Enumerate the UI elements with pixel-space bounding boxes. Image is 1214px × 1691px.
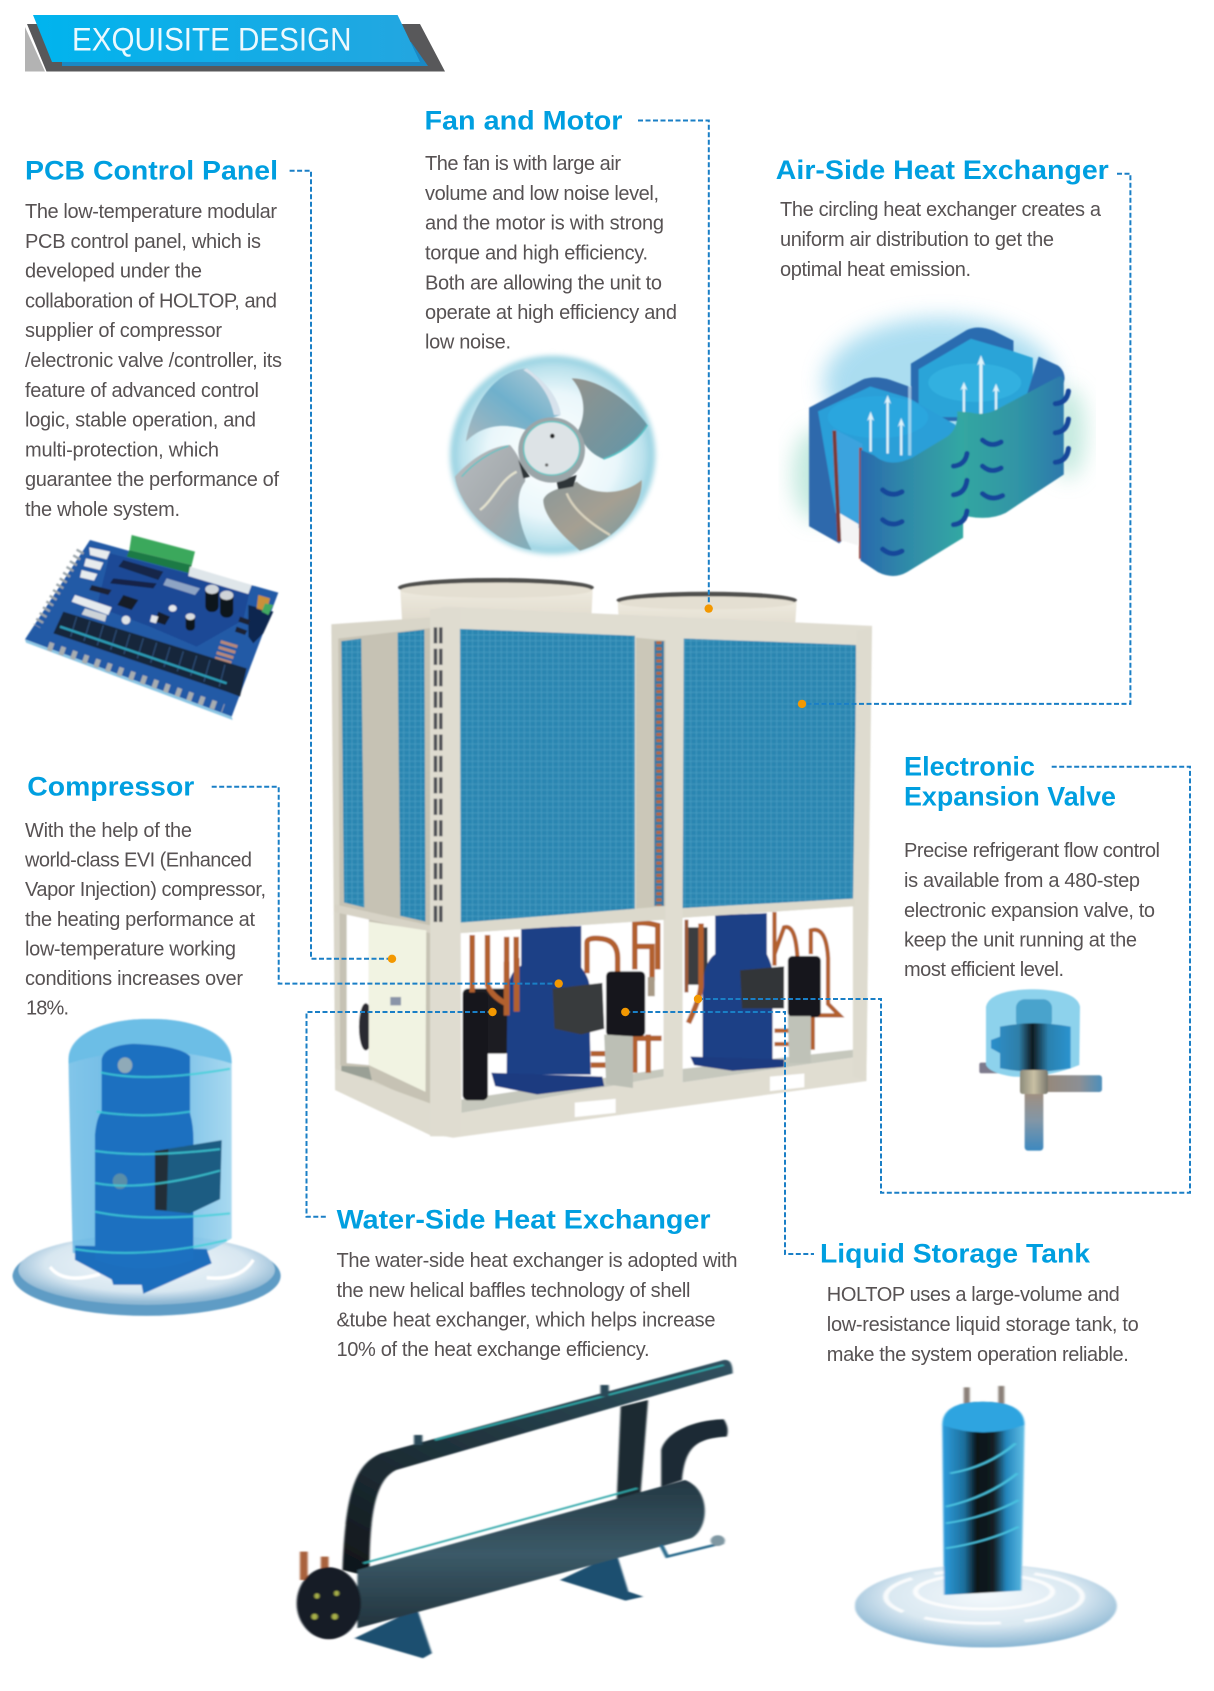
leader: Fan and Motor xyxy=(638,120,709,608)
lifting slots xyxy=(575,1099,616,1117)
text: PCB Control Panel description: the whole system. xyxy=(25,499,180,521)
inward-flow arrows xyxy=(883,391,1068,554)
mounting plate xyxy=(75,1246,212,1294)
text: Electronic Expansion Valve description xyxy=(904,840,1160,981)
text: Compressor description: world-class EVI (Enhanced xyxy=(24,849,252,871)
leader: Water-Side Heat Exchanger xyxy=(306,1012,492,1217)
lower opening left xyxy=(461,920,664,1113)
leader: Air-Side Heat Exchanger xyxy=(802,174,1130,704)
left fan cylinder xyxy=(400,589,593,629)
text: Liquid Storage Tank description: make the system operation reliable. xyxy=(827,1344,1129,1366)
junction box xyxy=(155,1140,222,1213)
center and right pillars xyxy=(666,626,683,1107)
text: Electronic Expansion Valve description: keep the unit running at the xyxy=(904,930,1137,952)
text: Water-Side Heat Exchanger description: The water-side heat exchanger is adopted with xyxy=(336,1250,738,1272)
rear right corner wall xyxy=(1027,357,1065,398)
glass cover xyxy=(986,989,1080,1077)
text: PCB Control Panel description: The low-temperature modular xyxy=(25,201,277,223)
relay row xyxy=(53,612,247,697)
text: Water-Side Heat Exchanger description: 10% of the heat exchange efficiency. xyxy=(336,1339,650,1361)
end cap xyxy=(297,1567,361,1639)
text: PCB Control Panel description: collaboration of HOLTOP, and xyxy=(25,290,277,312)
grey tank xyxy=(604,1034,633,1088)
grey tank xyxy=(788,1016,811,1063)
black tank right xyxy=(606,971,645,1036)
pins xyxy=(967,1386,1001,1410)
black tank xyxy=(788,956,821,1017)
copper fin edges xyxy=(834,431,839,542)
bottom screw terminals xyxy=(48,646,223,708)
illustration: compressor in glass dome xyxy=(13,1019,281,1316)
text: Compressor description: With the help of the xyxy=(25,820,192,842)
front coil right xyxy=(683,638,856,908)
copper pins xyxy=(304,1552,325,1588)
far foot xyxy=(560,1553,643,1601)
fan blade bottom-right xyxy=(543,480,642,551)
text: Liquid Storage Tank description xyxy=(827,1284,1139,1366)
banner title: EXQUISITE DESIGN xyxy=(72,22,352,58)
text: Air-Side Heat Exchanger description: uniform air distribution to get the xyxy=(780,229,1054,251)
heading: Electronic Expansion Valve: Expansion Valve xyxy=(904,782,1116,812)
vent slots xyxy=(435,627,441,923)
text: Compressor description: 18%. xyxy=(26,998,69,1020)
text: PCB Control Panel description: developed under the xyxy=(25,261,202,283)
heading: Compressor: Compressor xyxy=(27,772,195,802)
dish base xyxy=(855,1564,1117,1648)
text: Air-Side Heat Exchanger description: The circling heat exchanger creates a xyxy=(780,199,1102,221)
compressor body xyxy=(95,1044,193,1269)
illustration: axial fan and motor xyxy=(449,354,657,556)
text: Compressor description: Vapor Injection) compressor, xyxy=(25,879,266,901)
black tank left xyxy=(463,992,488,1100)
corner pillar xyxy=(430,609,460,1136)
text: Fan and Motor description: volume and low noise level, xyxy=(425,183,659,205)
lower pipe xyxy=(1025,1090,1043,1151)
text: Fan and Motor description: torque and high efficiency. xyxy=(425,242,648,264)
copper pipes right xyxy=(774,912,840,1050)
illustration: modular heat pump unit xyxy=(331,578,872,1138)
heading: Water-Side Heat Exchanger: Water-Side Heat Exchanger xyxy=(337,1204,711,1234)
compressor left xyxy=(463,926,651,1100)
spiral lines xyxy=(946,1443,1019,1548)
right pipe xyxy=(1046,1075,1102,1092)
text: PCB Control Panel description: supplier of compressor xyxy=(25,320,222,342)
text: Fan and Motor description: and the motor is with strong xyxy=(425,213,664,235)
cabinet front frame xyxy=(432,607,872,1138)
text: Compressor description xyxy=(24,820,266,1020)
brass collar xyxy=(1020,1070,1048,1094)
heading: Electronic Expansion Valve: Electronic xyxy=(904,752,1035,782)
right fan cylinder xyxy=(618,601,797,637)
side opening and control box xyxy=(347,914,369,1065)
rear right block xyxy=(911,327,1013,421)
fan blade bottom-left xyxy=(455,445,532,550)
marker dots xyxy=(388,604,806,1016)
front left face xyxy=(861,415,963,576)
green terminal block xyxy=(129,535,195,565)
text: Electronic Expansion Valve description: most efficient level. xyxy=(904,959,1064,981)
dish base xyxy=(13,1236,281,1316)
near foot xyxy=(354,1608,432,1658)
text: Fan and Motor description: operate at high efficiency and xyxy=(425,302,677,324)
text: Air-Side Heat Exchanger description xyxy=(780,199,1102,281)
text: Air-Side Heat Exchanger description: optimal heat emission. xyxy=(780,259,971,281)
text: PCB Control Panel description xyxy=(25,201,282,521)
banner: Exquisite Design xyxy=(25,15,445,72)
rear left block xyxy=(809,377,913,543)
heading: PCB Control Panel: PCB Control Panel xyxy=(25,155,278,185)
text: Fan and Motor description xyxy=(425,153,677,354)
leader: PCB Control Panel xyxy=(290,171,392,959)
air glow xyxy=(824,318,1056,448)
illustration: PCB control board xyxy=(25,535,278,720)
left stub xyxy=(979,1063,1003,1073)
left edge terminals xyxy=(37,551,81,626)
text: Fan and Motor description: Both are allowing the unit to xyxy=(425,272,662,294)
motor hub xyxy=(557,475,577,489)
heading: Air-Side Heat Exchanger: Air-Side Heat Exchanger xyxy=(776,155,1109,185)
valve top xyxy=(1016,999,1052,1029)
text: Water-Side Heat Exchanger description xyxy=(336,1250,738,1361)
middle panel with copper tubes xyxy=(636,638,665,910)
illustration: water-side heat exchanger xyxy=(297,1360,733,1658)
fan blade top-left xyxy=(466,368,561,442)
glass dome xyxy=(68,1019,232,1267)
cabinet side frame xyxy=(331,617,432,1136)
board xyxy=(25,540,278,717)
chips and components xyxy=(117,595,138,610)
text: PCB Control Panel description: guarantee the performance of xyxy=(25,469,279,491)
supply pipe xyxy=(343,1360,733,1577)
text: Fan and Motor description: low noise. xyxy=(425,332,511,354)
leader: Electronic Expansion Valve xyxy=(698,767,1190,1193)
text: Compressor description: low-temperature working xyxy=(25,938,236,960)
text: Electronic Expansion Valve description: Precise refrigerant flow control xyxy=(904,840,1160,862)
black object behind pipes xyxy=(463,989,510,1054)
fan blade top-right xyxy=(572,378,647,459)
text: PCB Control Panel description: /electronic valve /controller, its xyxy=(25,350,282,372)
resistors xyxy=(215,642,237,663)
drain pipe xyxy=(661,1543,724,1557)
compressor right xyxy=(690,913,821,1071)
shell xyxy=(357,1480,705,1628)
illustration: electronic expansion valve xyxy=(979,989,1102,1151)
copper pipes left xyxy=(472,923,662,1073)
text: PCB Control Panel description: multi-protection, which xyxy=(25,439,219,461)
heading: Fan and Motor: Fan and Motor xyxy=(424,106,623,136)
text: Water-Side Heat Exchanger description: &tube heat exchanger, which helps increase xyxy=(336,1310,716,1332)
text: Liquid Storage Tank description: HOLTOP uses a large-volume and xyxy=(827,1284,1120,1306)
text: PCB Control Panel description: PCB control panel, which is xyxy=(25,231,261,253)
side coils xyxy=(341,638,364,907)
teal bands xyxy=(75,1069,230,1253)
junction box xyxy=(553,983,604,1034)
text: Water-Side Heat Exchanger description: the new helical baffles technology of shell xyxy=(336,1280,690,1302)
elbow pipe xyxy=(661,1419,728,1487)
up-flow arrows xyxy=(867,355,1000,455)
text: Electronic Expansion Valve description: electronic expansion valve, to xyxy=(904,900,1155,922)
text: Liquid Storage Tank description: low-resistance liquid storage tank, to xyxy=(827,1314,1139,1336)
lower opening right xyxy=(683,906,853,1082)
tank xyxy=(942,1402,1024,1595)
vertical connector xyxy=(617,1400,648,1505)
text: Electronic Expansion Valve description: is available from a 480-step xyxy=(904,870,1140,892)
illustration: air-side heat exchanger xyxy=(793,318,1085,576)
text: Compressor description: conditions increases over xyxy=(25,968,243,990)
junction box xyxy=(740,966,784,1008)
leader: Compressor xyxy=(212,787,559,984)
text: Fan and Motor description: The fan is with large air xyxy=(425,153,621,175)
text: PCB Control Panel description: logic, stable operation, and xyxy=(25,410,256,432)
valve motor xyxy=(991,1023,1071,1072)
heading: Liquid Storage Tank: Liquid Storage Tank xyxy=(820,1239,1091,1269)
heading: Electronic Expansion Valve xyxy=(904,752,1116,812)
illustration: liquid storage tank xyxy=(855,1386,1117,1648)
text: PCB Control Panel description: feature of advanced control xyxy=(25,380,259,402)
text: Compressor description: the heating performance at xyxy=(25,909,255,931)
front right face xyxy=(957,376,1064,518)
leader: Liquid Storage Tank xyxy=(625,1012,814,1254)
white connectors xyxy=(188,567,252,594)
front coil left xyxy=(460,629,635,923)
